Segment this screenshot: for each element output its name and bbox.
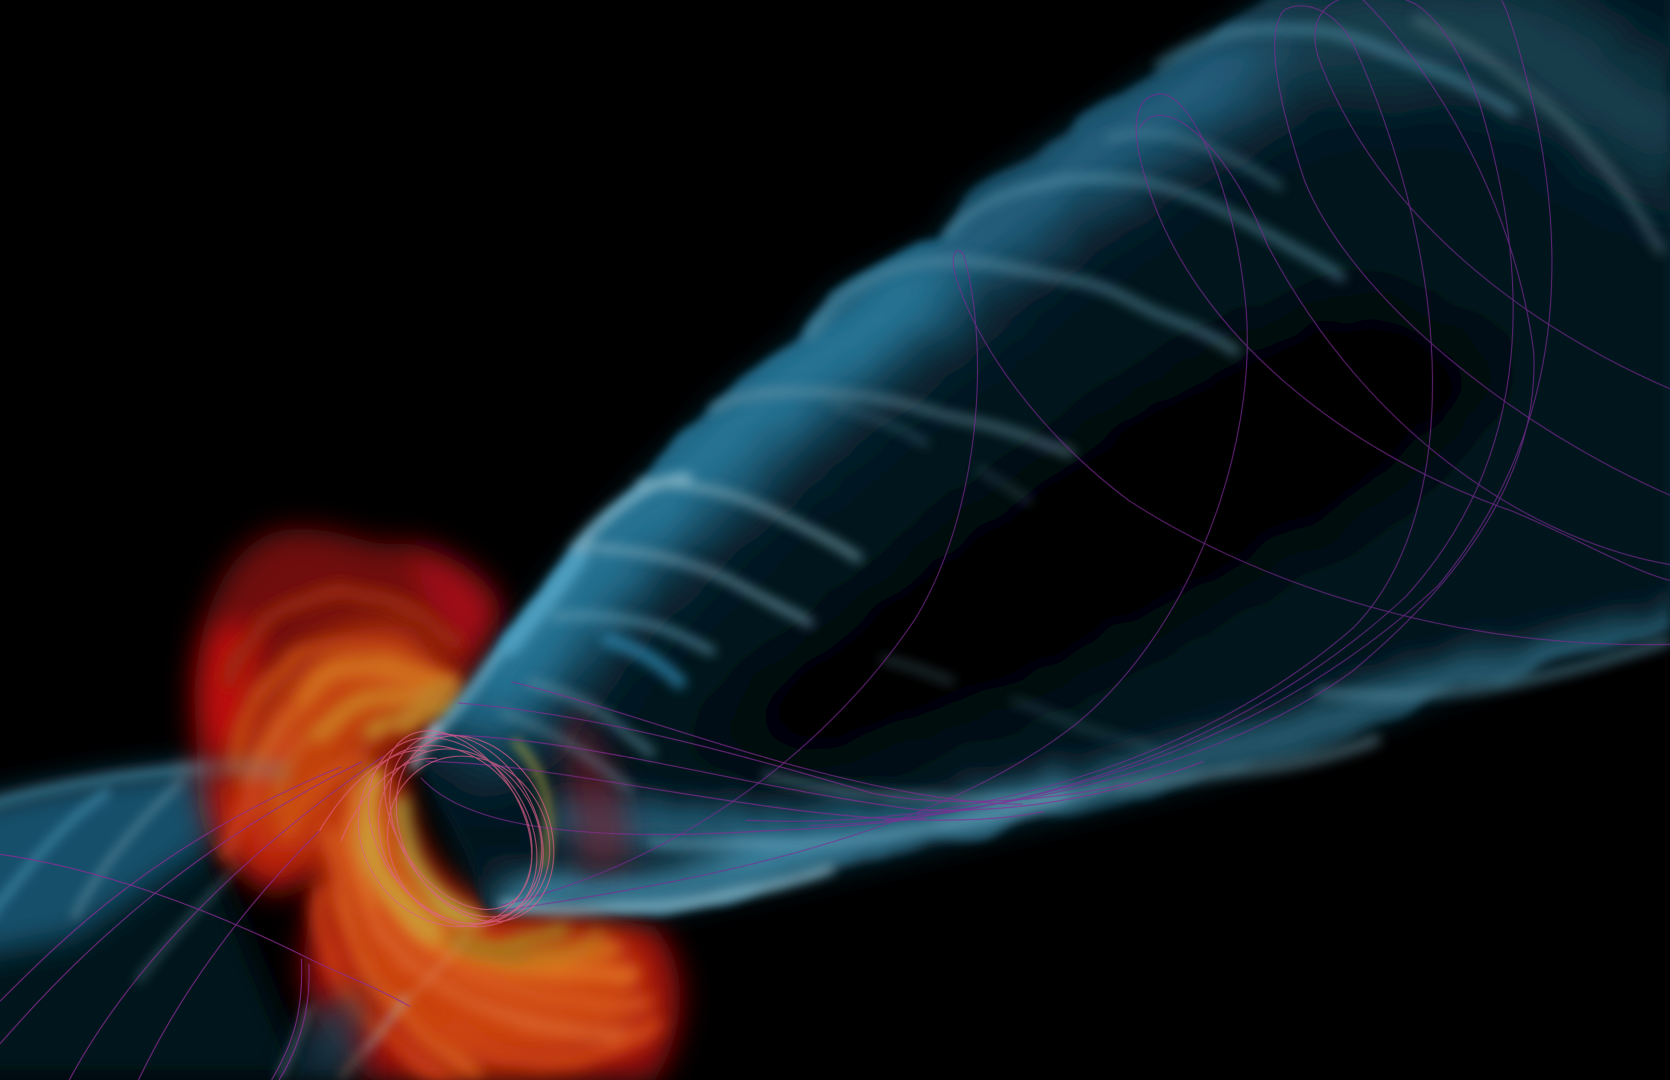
main jet cone xyxy=(410,0,1670,934)
haze where the counter jet crosses the disk xyxy=(176,767,288,772)
jet: dark interior xyxy=(426,0,1670,918)
jet: black core xyxy=(682,288,1512,767)
plume: highlights xyxy=(279,939,466,1078)
disk: lower orange streaks xyxy=(320,788,655,1078)
counter jet lower-left xyxy=(0,762,304,1080)
jet: outer halo xyxy=(421,0,1670,914)
jet: upper rim glow xyxy=(458,32,1670,735)
accretion disk xyxy=(194,529,680,1080)
jet: rim highlights and shell ridges xyxy=(431,21,1670,909)
disk: upper red-orange streaks xyxy=(229,593,458,852)
plume: blue body xyxy=(288,991,362,1080)
red disk glow seen through the jet xyxy=(564,703,629,873)
black hole shadow xyxy=(388,727,560,918)
disk: yellow inner crescent xyxy=(367,687,564,948)
lower plume of the counter jet xyxy=(279,939,466,1080)
magnetic field lines: bundle from hole to the right xyxy=(421,682,1204,834)
jet: lower rim glow xyxy=(501,623,1670,895)
jet: bright apex spot xyxy=(413,724,439,769)
magnetic field lines: jet loops xyxy=(501,0,1670,911)
disk: red outer glow xyxy=(194,529,680,1080)
counter jet: blue body xyxy=(0,762,245,964)
yellow-green ring on the far side of the hole xyxy=(513,740,549,868)
disk: orange mid-tone base xyxy=(240,626,650,1065)
counter jet: streaks xyxy=(0,767,240,980)
counter jet: dark lower region xyxy=(0,831,304,1080)
magnetic field lines: rings around the hole xyxy=(320,704,585,961)
jet: body xyxy=(424,0,1670,921)
magnetic field lines: left side xyxy=(0,756,410,1080)
